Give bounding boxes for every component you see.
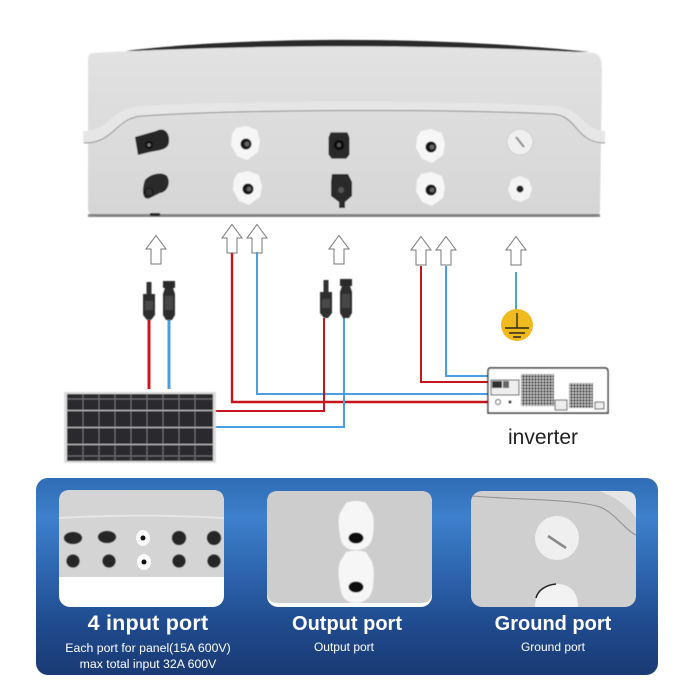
output glands [231,126,445,206]
heading: output port: Output port [292,613,402,635]
text: input port maximum: max total input 32A 600V [80,657,217,671]
text: output port description: Output port [314,640,375,654]
solar panel [64,392,216,463]
inverter [488,368,608,413]
wire: panel negative to left plug [168,320,170,389]
wire: ground [515,272,517,312]
enclosure body [88,46,602,217]
wire: panel to centre plug red [215,318,324,411]
wire: inverter blue return [446,266,489,376]
card: output port photo [267,491,432,607]
wire: inverter red return [421,266,489,382]
card: ground port photo [471,491,636,607]
wire: red output to inverter [232,253,489,402]
enclosure lid seam [83,102,605,143]
heading: 4 input port: 4 input port [88,611,208,635]
text: input port description: Each port for panel(15A 600V) [65,641,231,655]
wiring [149,252,516,427]
heading: ground port: Ground port [495,613,612,635]
MC4 plugs left [143,281,175,320]
panel: port details [36,478,658,675]
enclosure [83,40,605,217]
port arrows [146,224,526,265]
enclosure top edge [125,40,590,52]
MC4 plugs centre [320,279,352,318]
wire: blue output to inverter [257,252,489,394]
ground port cap [507,129,533,155]
inverter label: inverter [508,426,578,449]
card: 4 input port photo [59,490,224,607]
wire: panel positive to left plug [148,320,150,389]
wire: panel to centre plug blue [210,316,344,427]
ground port gland [508,176,532,202]
input connectors [135,129,352,208]
icon: ground symbol [501,309,533,341]
text: ground port description: Ground port [521,640,586,654]
